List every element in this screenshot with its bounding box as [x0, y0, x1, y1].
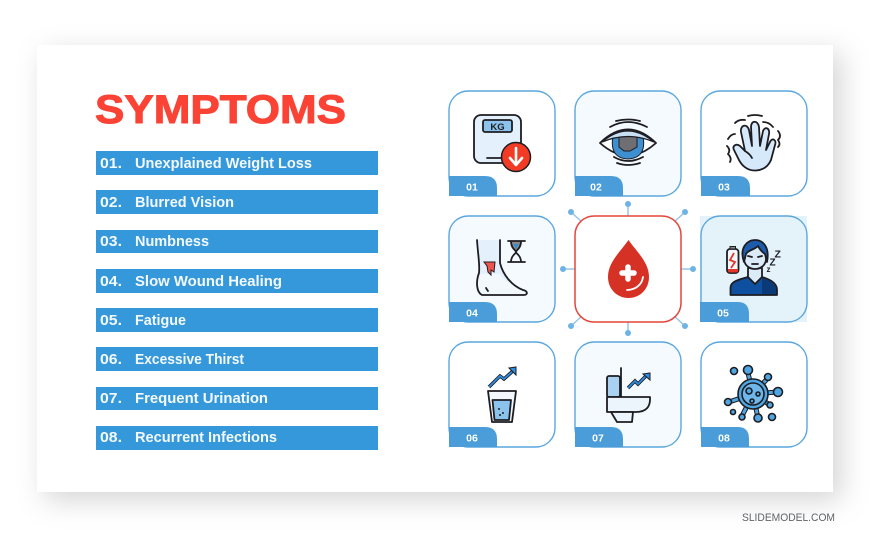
icon: blood drop — [608, 240, 649, 298]
list item 02 — [96, 190, 378, 214]
icon: eye — [600, 120, 656, 165]
slide panel — [37, 45, 833, 492]
icon: shaking hand — [727, 115, 780, 171]
card 01: weight loss: 01 — [466, 182, 478, 194]
icon: water glass with arrow — [488, 367, 516, 422]
list item 03: Numbness — [135, 234, 209, 250]
card 03: numbness — [701, 91, 807, 196]
list item 01: 01. — [100, 156, 122, 172]
list item 08 — [96, 426, 378, 450]
list item 07 — [96, 387, 378, 410]
card 05: fatigue: 05 — [717, 308, 729, 320]
card 04: slow wound healing: 04 — [466, 308, 478, 320]
list item 08: 08. — [100, 430, 122, 446]
list item 02: 02. — [100, 195, 122, 211]
symptom list — [96, 151, 378, 450]
icon: leg wound and hourglass — [477, 240, 527, 295]
list item 05: Fatigue — [135, 313, 186, 329]
list item 04: 04. — [100, 274, 122, 290]
center connectors — [560, 201, 696, 336]
card 01: weight loss — [449, 91, 555, 196]
list item 02: Blurred Vision — [135, 195, 234, 211]
icon: toilet with arrow — [607, 368, 650, 422]
card 06: excessive thirst: 06 — [466, 432, 478, 444]
list item 07: Frequent Urination — [135, 391, 268, 407]
list item 08: Recurrent Infections — [135, 430, 277, 446]
list item 03 — [96, 230, 378, 253]
watermark: SLIDEMODEL.COM — [742, 512, 835, 524]
card 07: frequent urination: 07 — [592, 432, 604, 444]
card 05: fatigue — [700, 216, 807, 322]
list item 06: Excessive Thirst — [135, 352, 244, 368]
card 06: excessive thirst — [449, 342, 555, 447]
title: SYMPTOMS — [95, 88, 346, 132]
card 04: slow wound healing — [449, 216, 555, 322]
list item 05: 05. — [100, 313, 122, 329]
card 02: blurred vision: 02 — [590, 182, 602, 194]
icon: tired person — [727, 240, 782, 295]
icon: tired person: z — [766, 265, 770, 274]
icon: tired person: Z — [770, 258, 776, 268]
card 08: recurrent infections: 08 — [718, 432, 730, 444]
card 08: recurrent infections — [701, 342, 807, 447]
list item 03: 03. — [100, 234, 122, 250]
icon: scale: KG — [490, 122, 505, 133]
card 03: numbness: 03 — [718, 182, 730, 194]
list item 01: Unexplained Weight Loss — [135, 156, 312, 172]
list item 06: 06. — [100, 352, 122, 368]
list item 05 — [96, 308, 378, 332]
card 07: frequent urination — [575, 342, 681, 447]
list item 06 — [96, 347, 378, 371]
card 02: blurred vision — [575, 91, 681, 196]
list item 04 — [96, 269, 378, 293]
icon: virus — [724, 366, 782, 422]
list item 07: 07. — [100, 391, 122, 407]
icon: tired person: Z — [774, 248, 782, 260]
list item 04: Slow Wound Healing — [135, 274, 282, 290]
list item 01 — [96, 151, 378, 175]
card center: blood drop — [575, 216, 681, 322]
